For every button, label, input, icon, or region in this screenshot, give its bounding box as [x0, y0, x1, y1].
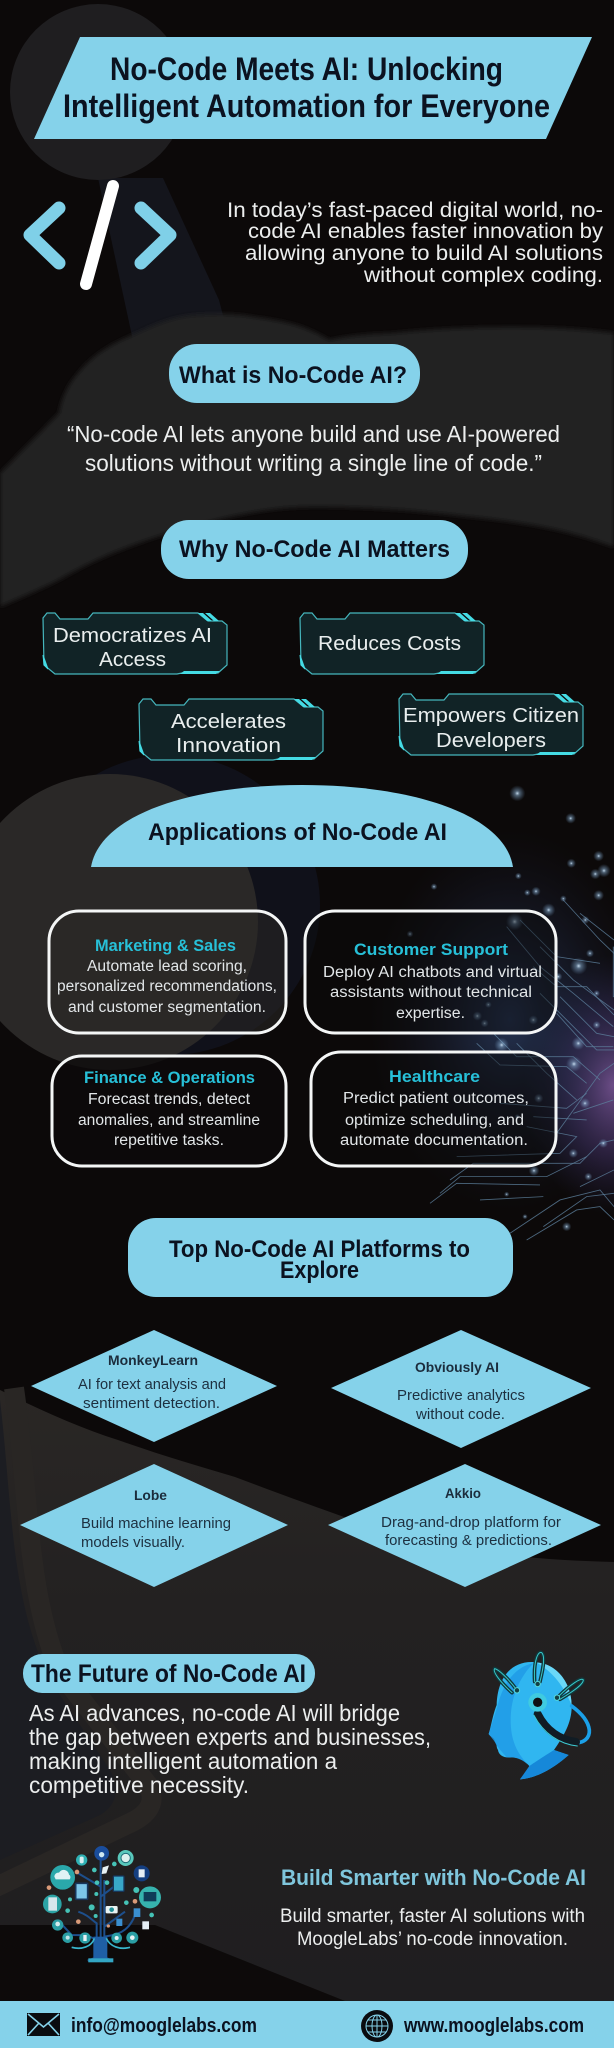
card: customer support — [305, 911, 556, 1033]
card: finance & operations: repetitive tasks. — [114, 1132, 224, 1149]
quote: solutions without writing a single line of code.” — [85, 450, 542, 476]
badge: democratizes AI access — [43, 613, 227, 674]
intro text: allowing anyone to build AI solutions — [245, 242, 603, 265]
heading: top platforms — [128, 1218, 513, 1297]
diamond: akkio: Drag-and-drop platform for — [381, 1515, 561, 1531]
diamond: akkio: forecasting & predictions. — [385, 1533, 552, 1549]
badge: accelerates innovation: Accelerates — [171, 710, 286, 733]
badge: empowers citizen developers: Developers — [436, 729, 546, 752]
diamond: monkeylearn — [31, 1330, 277, 1442]
diamond: akkio: Akkio — [445, 1485, 481, 1501]
card: finance & operations: Finance & Operations — [84, 1068, 255, 1087]
icon: AI head — [489, 1652, 589, 1779]
card: customer support: Customer Support — [354, 940, 508, 959]
card: marketing & sales: and customer segmentation. — [68, 999, 266, 1016]
icon: code brackets — [30, 186, 170, 284]
intro text: without complex coding. — [363, 264, 603, 287]
icon: tech tree — [43, 1846, 161, 1962]
diamond: lobe: Build machine learning — [81, 1516, 231, 1532]
diamond: lobe — [20, 1464, 288, 1587]
future paragraph: As AI advances, no-code AI will bridge — [29, 1700, 400, 1726]
card: customer support: assistants without technical — [330, 984, 532, 1001]
call to action: Build Smarter with No-Code AI — [281, 1865, 586, 1890]
diamond: monkeylearn: MonkeyLearn — [108, 1352, 198, 1368]
badge: reduces costs — [300, 613, 484, 674]
card: customer support: expertise. — [396, 1005, 465, 1022]
badge: accelerates innovation: Innovation — [176, 734, 281, 757]
title banner: Intelligent Automation for Everyone — [63, 88, 550, 124]
heading: top platforms: Explore — [280, 1257, 359, 1284]
diamond: obviously AI: Obviously AI — [415, 1359, 499, 1375]
icon: globe — [361, 2010, 393, 2042]
circuit board — [430, 900, 614, 1240]
diamond: akkio — [328, 1464, 601, 1587]
card: marketing & sales: Marketing & Sales — [95, 936, 236, 955]
intro text: In today’s fast-paced digital world, no- — [227, 199, 603, 222]
heading: the future of no-code AI — [23, 1654, 315, 1693]
website: www.mooglelabs.com — [403, 2015, 584, 2037]
future paragraph: competitive necessity. — [29, 1772, 249, 1798]
heading: what is no-code AI: What is No-Code AI? — [179, 362, 407, 389]
diamond: obviously AI — [331, 1330, 591, 1448]
badge: democratizes AI access: Democratizes AI — [53, 624, 212, 647]
intro text: code AI enables faster innovation by — [248, 220, 604, 243]
diamond: lobe: Lobe — [134, 1487, 167, 1503]
diamond: monkeylearn: AI for text analysis and — [78, 1377, 226, 1393]
heading: why no-code AI matters — [161, 520, 468, 579]
title banner: No-Code Meets AI: Unlocking — [110, 51, 503, 87]
intro text — [227, 199, 604, 287]
card: customer support: Deploy AI chatbots and virtual — [323, 964, 542, 981]
card: marketing & sales: Automate lead scoring, — [87, 958, 247, 975]
diamond: lobe: models visually. — [81, 1535, 185, 1551]
call to action: Build smarter, faster AI solutions with — [280, 1906, 585, 1927]
call to action: MoogleLabs’ no-code innovation. — [297, 1929, 568, 1950]
quote — [67, 421, 560, 476]
card: healthcare: automate documentation. — [340, 1132, 528, 1149]
diamond: obviously AI: without code. — [415, 1407, 505, 1423]
future paragraph — [29, 1700, 431, 1798]
card: finance & operations — [52, 1056, 286, 1166]
badge: reduces costs: Reduces Costs — [318, 632, 461, 655]
card: healthcare: Predict patient outcomes, — [343, 1090, 529, 1107]
heading: top platforms: Top No-Code AI Platforms to — [169, 1236, 470, 1263]
heading: the future of no-code AI: The Future of No-Code AI — [31, 1660, 306, 1688]
card: marketing & sales: personalized recommendations, — [57, 978, 277, 995]
badge: democratizes AI access: Access — [99, 648, 166, 671]
title banner — [34, 37, 592, 139]
card: marketing & sales — [49, 911, 286, 1033]
heading: applications dome — [91, 785, 513, 867]
quote: “No-code AI lets anyone build and use AI-powered — [67, 421, 560, 447]
call to action — [280, 1865, 586, 1950]
badge: empowers citizen developers: Empowers Citizen — [403, 704, 579, 727]
diamond: obviously AI: Predictive analytics — [397, 1388, 525, 1404]
card: healthcare: optimize scheduling, and — [345, 1112, 524, 1129]
badge: accelerates innovation — [139, 699, 323, 760]
badge: empowers citizen developers — [399, 694, 583, 755]
card: healthcare: Healthcare — [389, 1067, 480, 1086]
email: info@mooglelabs.com — [71, 2015, 257, 2037]
diamond: monkeylearn: sentiment detection. — [83, 1396, 220, 1412]
heading: what is no-code AI — [169, 344, 420, 403]
footer bar — [0, 2001, 614, 2048]
card: finance & operations: anomalies, and streamline — [78, 1112, 260, 1129]
heading: applications dome: Applications of No-Code AI — [148, 819, 447, 846]
card: finance & operations: Forecast trends, detect — [88, 1091, 251, 1108]
future paragraph: the gap between experts and businesses, — [29, 1724, 431, 1750]
card: healthcare — [311, 1052, 556, 1166]
future paragraph: making intelligent automation a — [29, 1748, 337, 1774]
icon: envelope — [27, 2013, 60, 2036]
heading: why no-code AI matters: Why No-Code AI Matters — [179, 536, 450, 563]
